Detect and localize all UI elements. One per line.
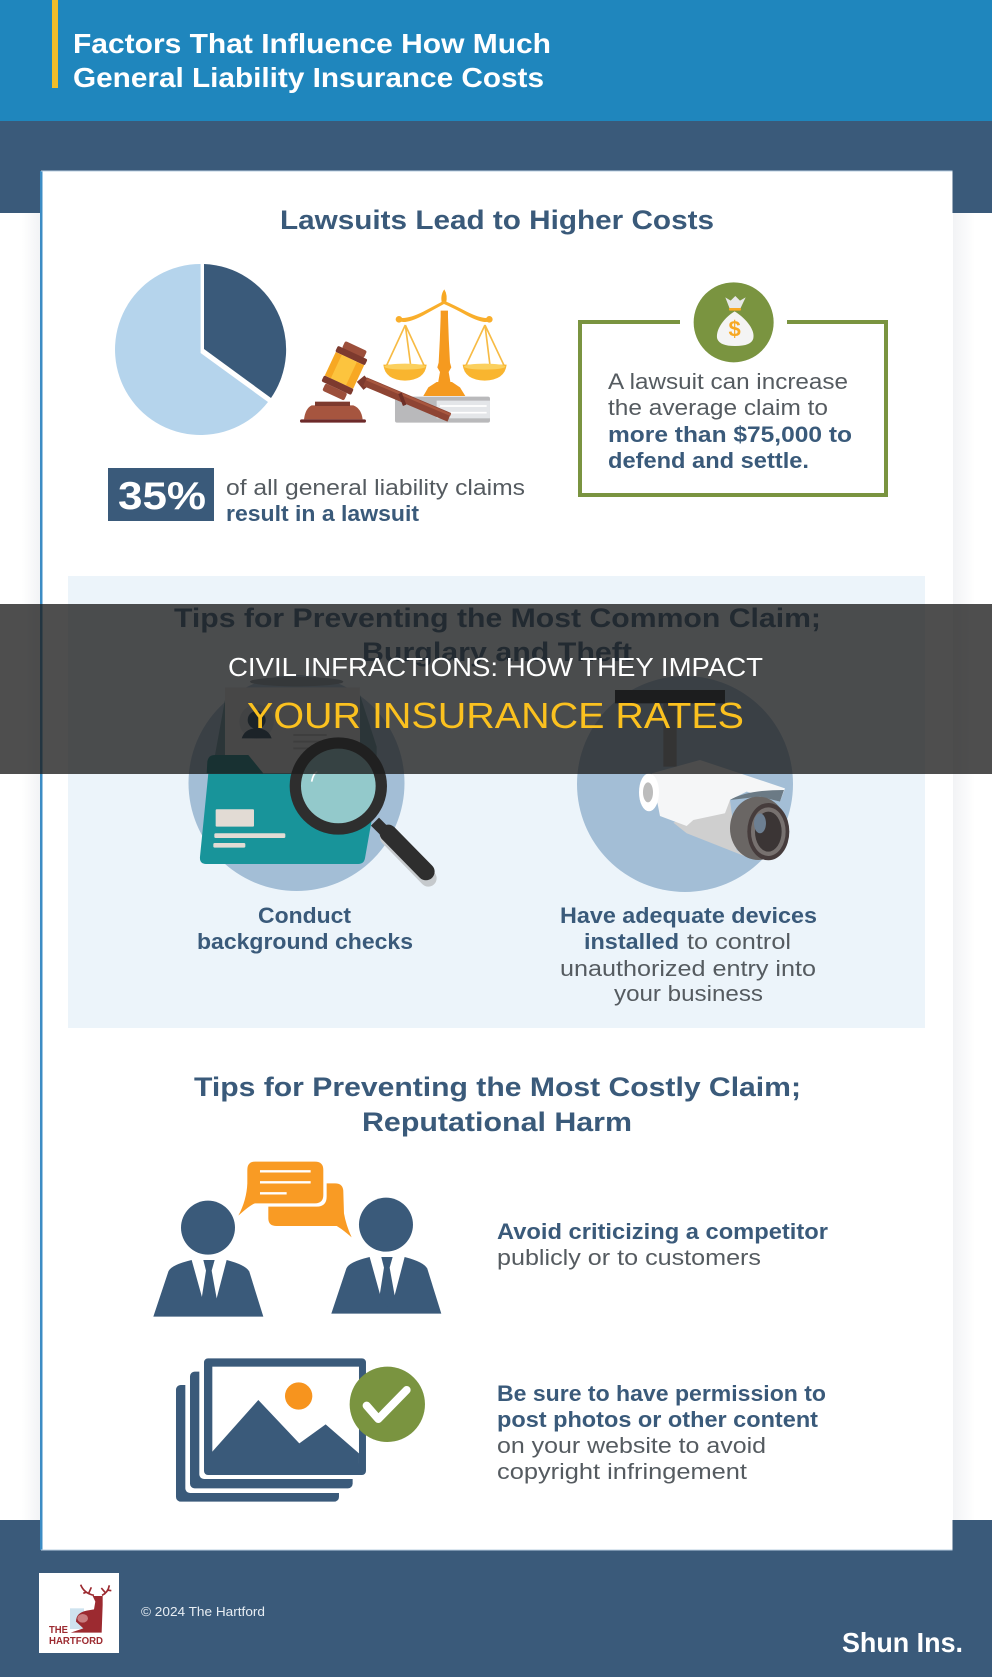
text: adequate devices [560,903,817,1006]
panel: burglary and theft tips [68,576,925,1028]
overlay banner [0,604,992,774]
icon: gavel and scales [300,289,507,423]
panel: reputational harm tips [153,1072,828,1502]
stat: 35 percent: of all general liability claims [226,475,525,500]
header band [0,0,992,121]
heading: burglary and theft: Burglary and Theft [362,637,632,667]
icon: two people talking [153,1162,441,1317]
text: permission [497,1381,826,1484]
callout: average claim [580,282,886,495]
footer logo: The Hartford [39,1573,119,1653]
heading: reputational harm: Reputational Harm [362,1107,632,1137]
callout: average claim: A lawsuit can increase [608,369,848,394]
panel: lawsuits [108,205,886,526]
footer logo: The Hartford: HARTFORD [49,1636,103,1647]
text: avoid criticizing: publicly or to customers [497,1245,761,1270]
callout: average claim: the average claim to [608,395,828,420]
text: adequate devices: installed [584,929,679,954]
pie chart: 35 percent [115,264,286,435]
brand: Shun Ins.: Shun Ins. [842,1627,963,1658]
text: adequate devices: Have adequate devices [560,903,817,928]
title [73,28,551,93]
text: avoid criticizing: Avoid criticizing a competitor [497,1219,828,1244]
icon: money bag [694,282,774,362]
icon: photos with check [176,1358,425,1502]
text: permission: on your website to avoid [497,1433,766,1458]
stat: 35 percent: result in a lawsuit [226,501,420,526]
main white card [41,171,952,1550]
title: Factors That Influence How Much [73,28,551,59]
heading: reputational harm: Tips for Preventing the Most Costly Claim; [194,1072,801,1102]
overlay title line 1: CIVIL INFRACTIONS: HOW THEY IMPACT [228,652,763,682]
title: General Liability Insurance Costs [73,62,544,93]
copyright text: © 2024 The Hartford [141,1604,265,1619]
callout: average claim: defend and settle. [608,448,809,473]
heading: lawsuits: Lawsuits Lead to Higher Costs [280,205,714,235]
text: permission: post photos or other content [497,1407,819,1432]
icon: money bag: $ [729,316,741,341]
text: adequate devices: to control [687,929,791,954]
heading: burglary and theft [174,603,821,667]
icon: security camera [577,676,793,892]
footer logo: The Hartford: THE [49,1625,68,1636]
text: avoid criticizing [497,1219,828,1270]
text: permission: Be sure to have permission to [497,1381,826,1406]
heading: reputational harm [194,1072,801,1137]
stat: 35 percent [108,468,525,526]
icon: background check folder [188,675,428,891]
text: conduct background checks [197,903,413,954]
stat: 35 percent: 35% [118,475,206,518]
text: adequate devices: your business [614,981,763,1006]
heading: burglary and theft: Tips for Preventing the Most Common Claim; [174,603,821,633]
text: adequate devices: unauthorized entry into [560,956,816,981]
footer band [0,1520,992,1677]
dark band behind card [0,121,992,213]
overlay title line 2: YOUR INSURANCE RATES [247,695,744,736]
text: permission: copyright infringement [497,1459,747,1484]
text: conduct background checks: background checks [197,929,413,954]
text: conduct background checks: Conduct [258,903,352,928]
callout: average claim: more than $75,000 to [608,422,852,447]
